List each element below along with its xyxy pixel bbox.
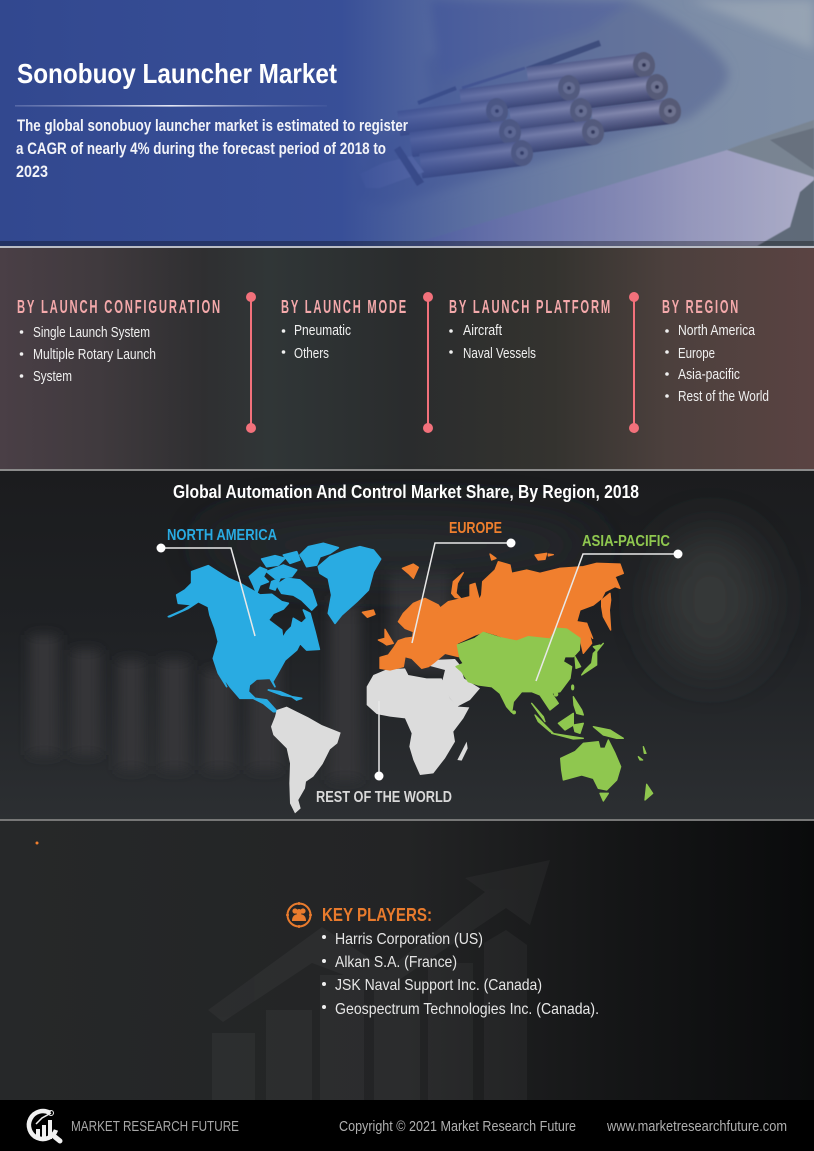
icon: market research future logo (29, 1110, 60, 1141)
segment: by launch configuration: BY LAUNCH CONFIGURATION (17, 296, 222, 317)
segment: by launch platform: BY LAUNCH PLATFORM (449, 296, 612, 317)
launcher tubes (360, 43, 683, 188)
key players list: Alkan S.A. (France) (335, 954, 457, 971)
world map: North America (168, 543, 381, 712)
label: Europe (412, 520, 516, 643)
map title: Global Automation And Control Market Share, By Region, 2018 (173, 482, 639, 502)
segment: by launch platform: Aircraft (463, 323, 502, 339)
brand name: MARKET RESEARCH FUTURE (71, 1118, 239, 1135)
key players list: Harris Corporation (US) (335, 931, 483, 948)
segment: by region: Rest of the World (678, 389, 769, 405)
segment: by launch mode: Others (294, 346, 329, 362)
hero description (16, 117, 408, 181)
copyright: Copyright © 2021 Market Research Future (339, 1118, 576, 1135)
hero title: Sonobuoy Launcher Market (17, 58, 337, 89)
world map: Rest of the World (271, 659, 480, 813)
title rule (15, 105, 327, 107)
key players list: Geospectrum Technologies Inc. (Canada). (335, 1001, 599, 1018)
stray orange marker (36, 842, 38, 844)
segment: by region: North America (678, 323, 756, 339)
website: www.marketresearchfuture.com (606, 1118, 787, 1135)
divider 3 (629, 292, 639, 433)
hero description: 2023 (16, 163, 48, 181)
segment: by region (662, 296, 769, 405)
label: Rest of the World (316, 701, 452, 806)
panel: regional map (0, 471, 814, 821)
hero description: a CAGR of nearly 4% during the forecast period of 2018 to (16, 140, 386, 158)
panel: market segments (0, 248, 814, 471)
panel: footer (0, 1100, 814, 1151)
segment: by launch configuration: System (33, 369, 72, 385)
segment: by launch platform: Naval Vessels (463, 346, 536, 362)
world map: Europe and Russia (362, 553, 623, 670)
segment: by region: Asia-pacific (678, 367, 740, 383)
divider 2 (423, 292, 433, 433)
world map: Asia-Pacific (456, 628, 653, 801)
segment: by launch configuration (17, 296, 222, 385)
key players list: JSK Naval Support Inc. (Canada) (335, 977, 542, 994)
segment: by launch platform (449, 296, 612, 362)
label: Europe: EUROPE (449, 520, 502, 537)
key players list (322, 931, 599, 1018)
divider 1 (246, 292, 256, 433)
segment: by launch configuration: Multiple Rotary Launch (33, 347, 156, 363)
background arrow chart (208, 860, 550, 1100)
segment: by launch mode: BY LAUNCH MODE (281, 296, 408, 317)
label: Rest of the World: REST OF THE WORLD (316, 789, 452, 806)
segment: by launch mode: Pneumatic (294, 323, 351, 339)
hero description: The global sonobuoy launcher market is estimated to register (17, 117, 408, 135)
segment: by region: BY REGION (662, 296, 740, 317)
label: North America: NORTH AMERICA (167, 527, 277, 544)
label: Asia-Pacific: ASIA-PACIFIC (582, 533, 670, 550)
panel: hero header (0, 0, 814, 246)
segment: by region: Europe (678, 346, 715, 362)
heading: key players: KEY PLAYERS: (322, 904, 432, 925)
hero photo: aircraft wing and launcher (353, 0, 814, 246)
panel: key players (0, 821, 814, 1100)
icon: key players target (286, 902, 312, 928)
segment: by launch mode (281, 296, 408, 362)
segment: by launch configuration: Single Launch System (33, 325, 150, 341)
label: North America (156, 527, 277, 636)
label: Asia-Pacific (536, 533, 682, 681)
